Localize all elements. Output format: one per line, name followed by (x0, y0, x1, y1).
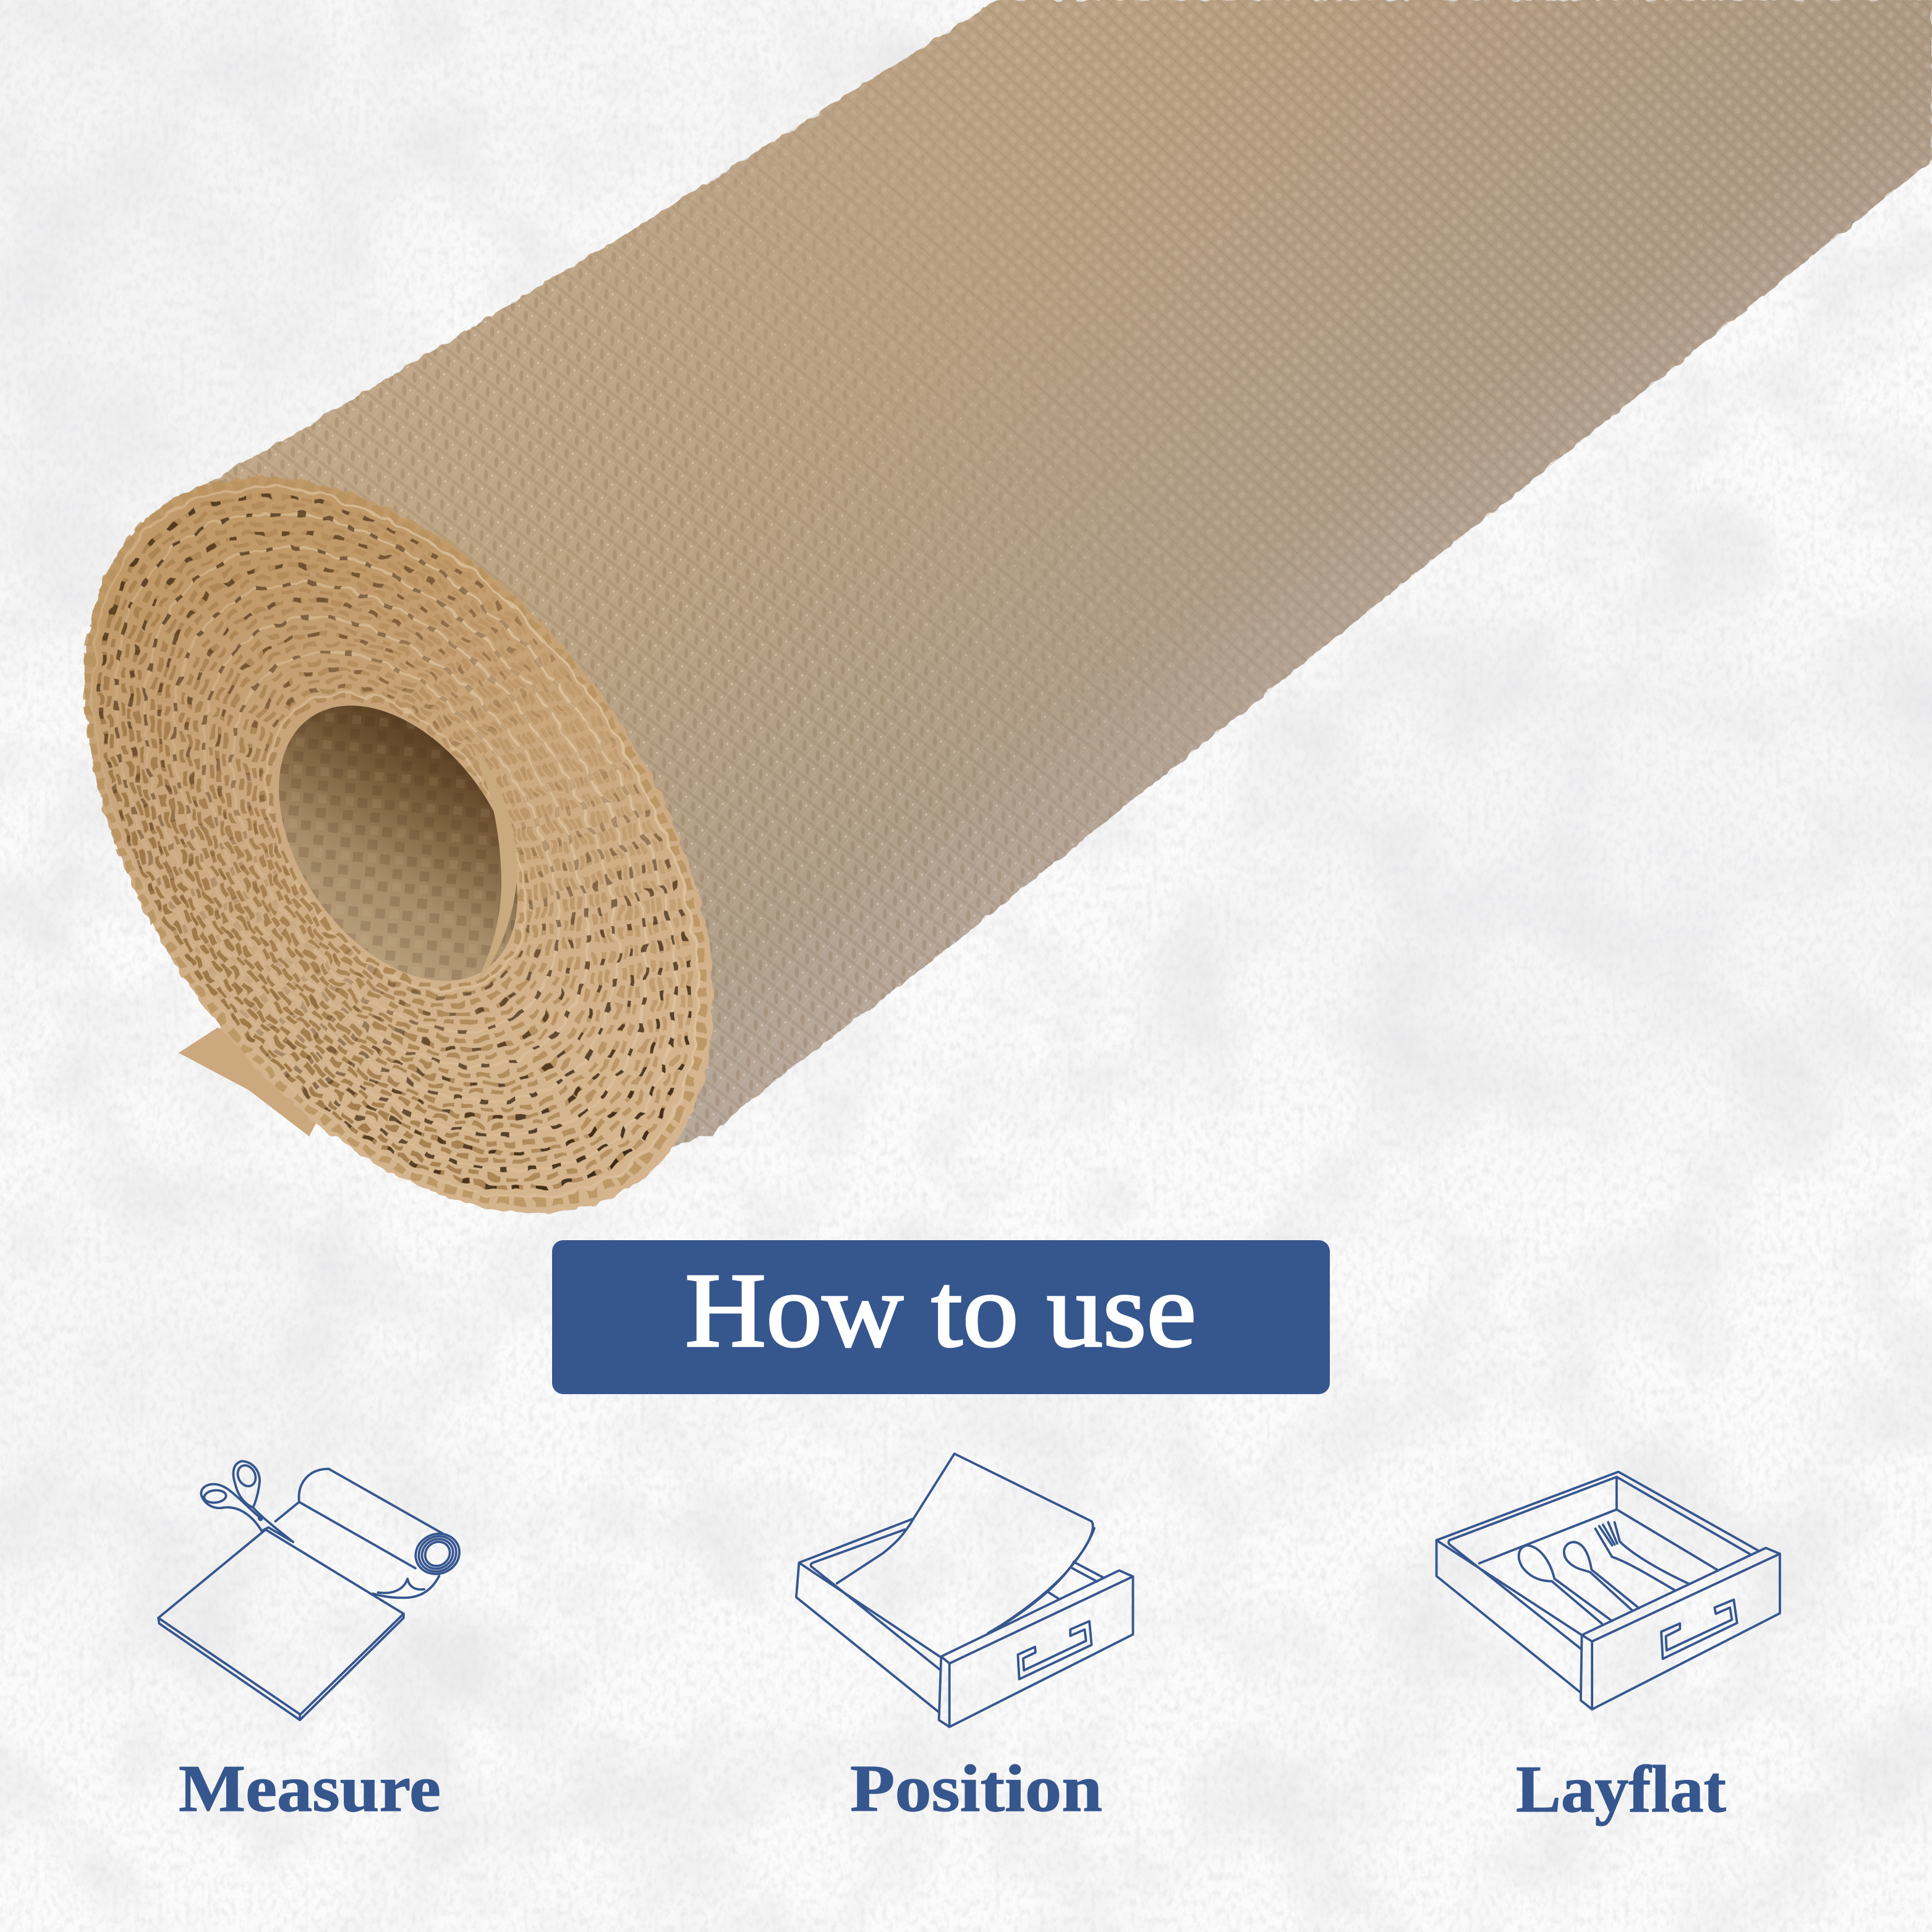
roll end face: concentric wound layers (0, 362, 842, 1328)
icon: open drawer with cutlery on liner (1437, 1472, 1780, 1709)
label: Measure: Measure (179, 1752, 441, 1826)
title text: How to use (685, 1252, 1196, 1369)
icon: liner sheet going into drawer (796, 1453, 1133, 1727)
loose sheet end under the roll (179, 1028, 321, 1136)
step 3: lay flat (1437, 1472, 1780, 1826)
label: Position: Position (850, 1752, 1102, 1826)
step 1: measure (158, 1461, 463, 1826)
roll body with woven diamond texture (200, 0, 1932, 1147)
roll core hole (230, 662, 566, 1025)
step 2: position (796, 1453, 1133, 1826)
icon: scissors cutting liner roll (158, 1461, 463, 1720)
product photo: rolled tan drawer liner (83, 0, 1932, 1214)
label: Layflat: Layflat (1516, 1753, 1726, 1826)
title banner (552, 1240, 1330, 1394)
